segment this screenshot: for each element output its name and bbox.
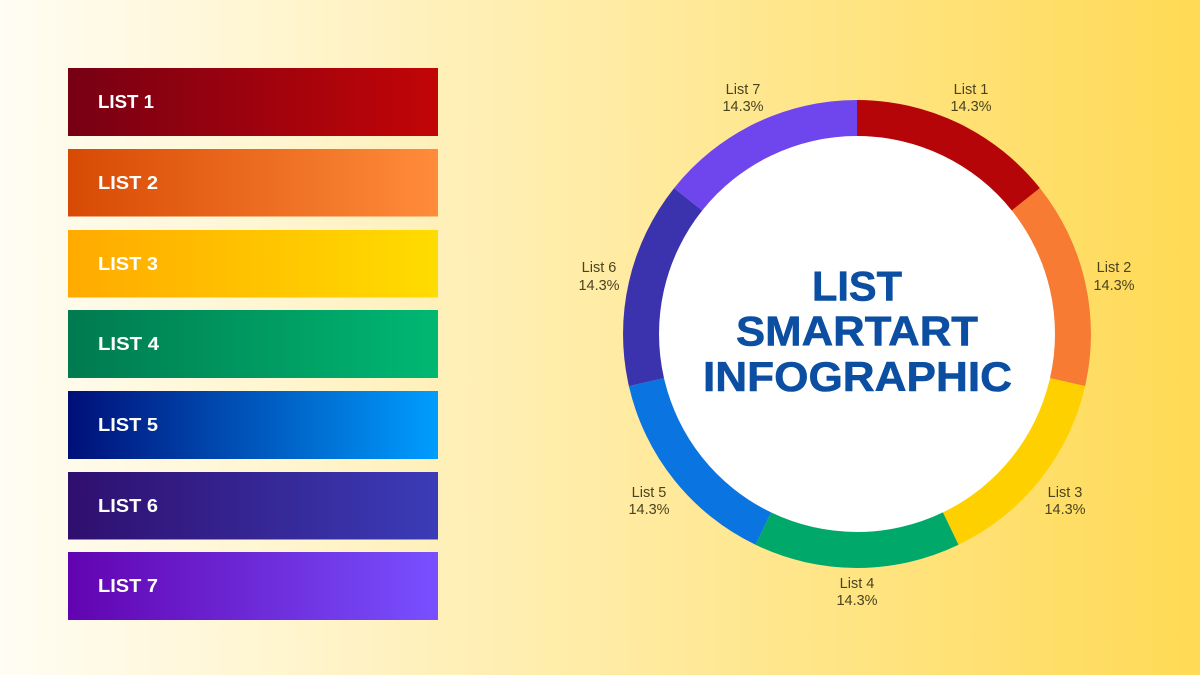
bar: list 3: LIST 3 bbox=[98, 253, 158, 274]
bar: list 1: LIST 1 bbox=[98, 91, 154, 112]
donut chart bbox=[623, 100, 1091, 568]
bar: list 2 bbox=[68, 149, 438, 216]
label: list 1: 14.3% bbox=[950, 99, 992, 115]
bar: list 1 bbox=[68, 68, 438, 136]
chart labels bbox=[578, 82, 1135, 609]
bar: list 2: LIST 2 bbox=[98, 172, 158, 193]
bar: list 5: LIST 5 bbox=[98, 414, 158, 435]
label: list 2: List 2 bbox=[1097, 260, 1131, 276]
bar: list 6 bbox=[68, 472, 438, 540]
label: list 6: 14.3% bbox=[578, 278, 620, 294]
bar: list 7 bbox=[68, 552, 438, 620]
label: list 3: List 3 bbox=[1048, 485, 1082, 501]
title: SMARTART bbox=[736, 308, 978, 354]
title bbox=[703, 262, 1012, 400]
segment: list 2 bbox=[1012, 188, 1091, 386]
bar: list 4 bbox=[68, 310, 438, 378]
segment: list 7 bbox=[674, 100, 857, 210]
panel: list bars bbox=[68, 68, 438, 620]
label: list 6: List 6 bbox=[582, 260, 616, 276]
bar: list 4: LIST 4 bbox=[98, 333, 160, 354]
inner white circle bbox=[658, 135, 1056, 533]
label: list 1: List 1 bbox=[954, 82, 988, 98]
label: list 5: List 5 bbox=[632, 485, 666, 501]
label: list 2: 14.3% bbox=[1093, 278, 1135, 294]
segment: list 3 bbox=[943, 378, 1085, 545]
bar: list 7: LIST 7 bbox=[98, 575, 158, 596]
label: list 4: 14.3% bbox=[836, 593, 878, 609]
segment: list 1 bbox=[857, 100, 1040, 210]
label: list 7: List 7 bbox=[726, 82, 760, 98]
bar: list 3 bbox=[68, 230, 438, 298]
title: INFOGRAPHIC bbox=[703, 353, 1012, 400]
segment: list 6 bbox=[623, 188, 702, 386]
label: list 7: 14.3% bbox=[722, 99, 764, 115]
label: list 4: List 4 bbox=[840, 576, 874, 592]
segment: list 4 bbox=[756, 512, 958, 568]
label: list 5: 14.3% bbox=[628, 502, 670, 518]
label: list 3: 14.3% bbox=[1044, 502, 1086, 518]
title: LIST bbox=[812, 262, 902, 310]
segment: list 5 bbox=[629, 378, 771, 545]
bar: list 5 bbox=[68, 391, 438, 459]
bar: list 6: LIST 6 bbox=[98, 495, 158, 516]
